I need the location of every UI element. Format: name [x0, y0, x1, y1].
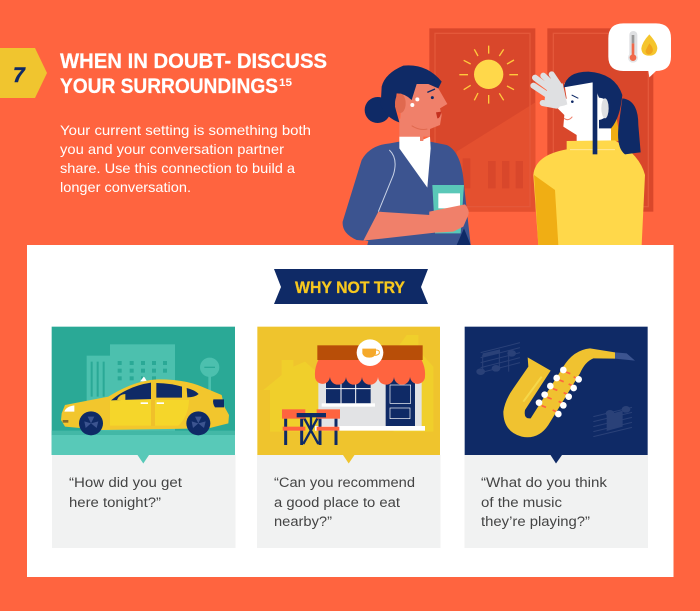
- card: taxi: [52, 327, 236, 548]
- quote: [274, 475, 415, 529]
- number badge: [0, 48, 47, 98]
- pointer: [343, 455, 354, 464]
- number badge: 7: [13, 64, 26, 87]
- quote: “Can you recommend: [274, 475, 415, 490]
- quote: [481, 475, 607, 529]
- speech bubble: heat icons: [608, 23, 671, 77]
- intro text: longer conversation.: [60, 179, 191, 195]
- card: saxophone: [464, 327, 648, 548]
- intro text: share. Use this connection to build a: [60, 160, 295, 176]
- quote: “What do you think: [481, 475, 607, 490]
- woman with glass: [343, 65, 471, 245]
- window left with sun: [429, 28, 535, 212]
- illustration: two people talking by a sunny window: [343, 23, 671, 245]
- pointer: [550, 455, 562, 464]
- banner: why not try: WHY NOT TRY: [295, 278, 406, 297]
- intro text: [60, 122, 311, 195]
- title: 15: [279, 77, 292, 89]
- quote: they’re playing?”: [481, 514, 590, 529]
- quote: nearby?”: [274, 514, 332, 529]
- quote: [69, 475, 182, 510]
- quote: of the music: [481, 495, 562, 510]
- window right: [547, 28, 653, 212]
- pointer: [138, 455, 149, 464]
- quote: here tonight?”: [69, 495, 161, 510]
- illustration: saxophone: [465, 327, 648, 455]
- intro text: Your current setting is something both: [60, 122, 311, 138]
- quote: a good place to eat: [274, 495, 400, 510]
- card: restaurant: [257, 327, 440, 548]
- title: YOUR SURROUNDINGS: [60, 75, 278, 98]
- woman shading her eyes: [533, 72, 645, 245]
- quote: “How did you get: [69, 475, 182, 490]
- illustration: taxi: [52, 327, 235, 455]
- banner: why not try: [274, 269, 428, 304]
- illustration: cafe: [257, 327, 440, 455]
- white panel: [27, 245, 674, 577]
- title: WHEN IN DOUBT- DISCUSS: [60, 50, 327, 73]
- intro text: you and your conversation partner: [60, 141, 284, 157]
- title: [60, 50, 327, 98]
